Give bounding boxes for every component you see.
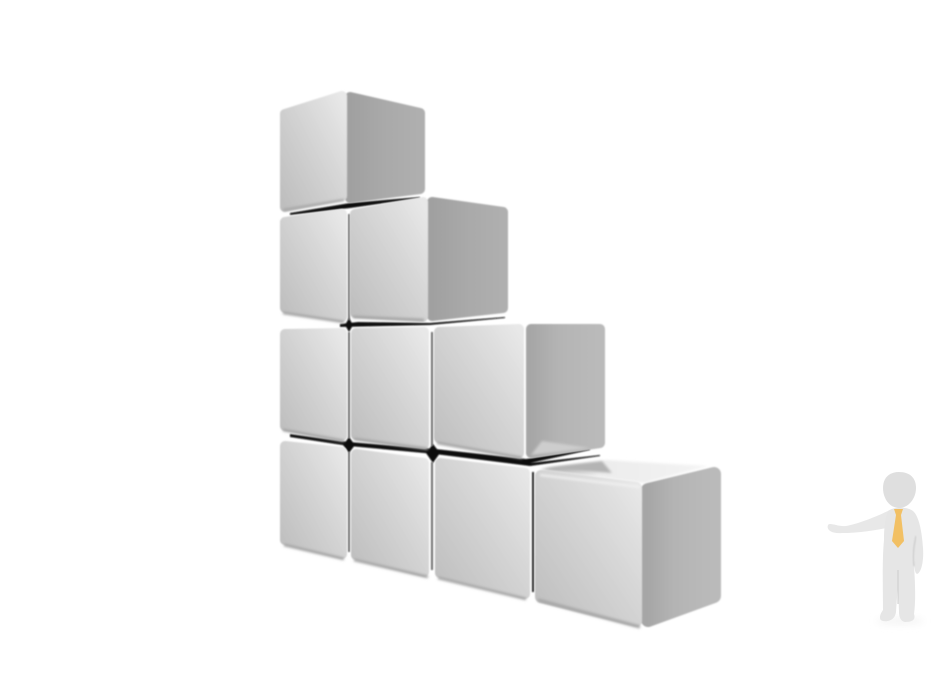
arm and hand [828,509,894,533]
cube row 2, column 1 [283,212,346,322]
cube row 3, column 2 [354,330,430,449]
head [883,472,916,508]
ground shadow [876,618,924,624]
cube row 4, column 1 [284,446,346,559]
large cube side face [648,474,714,620]
cube row 3, column 3 [437,324,600,458]
dark crevices between cubes [290,197,600,466]
cube row 4, column 2 [354,454,430,577]
cube row 4, column 3 [438,463,529,599]
cube stack [283,94,714,627]
presenter figure [828,472,924,624]
large cube top face [540,460,708,483]
large front cube [538,460,714,627]
cube row 3, column 1 [283,330,346,441]
body and legs [880,508,923,622]
large cube front face [541,476,636,621]
limb shading [913,536,916,566]
cube row 1, column 1 [283,94,420,210]
tie [892,509,904,548]
grey vertical seams between cubes [349,214,533,592]
cube row 2, column 2 [353,198,503,320]
